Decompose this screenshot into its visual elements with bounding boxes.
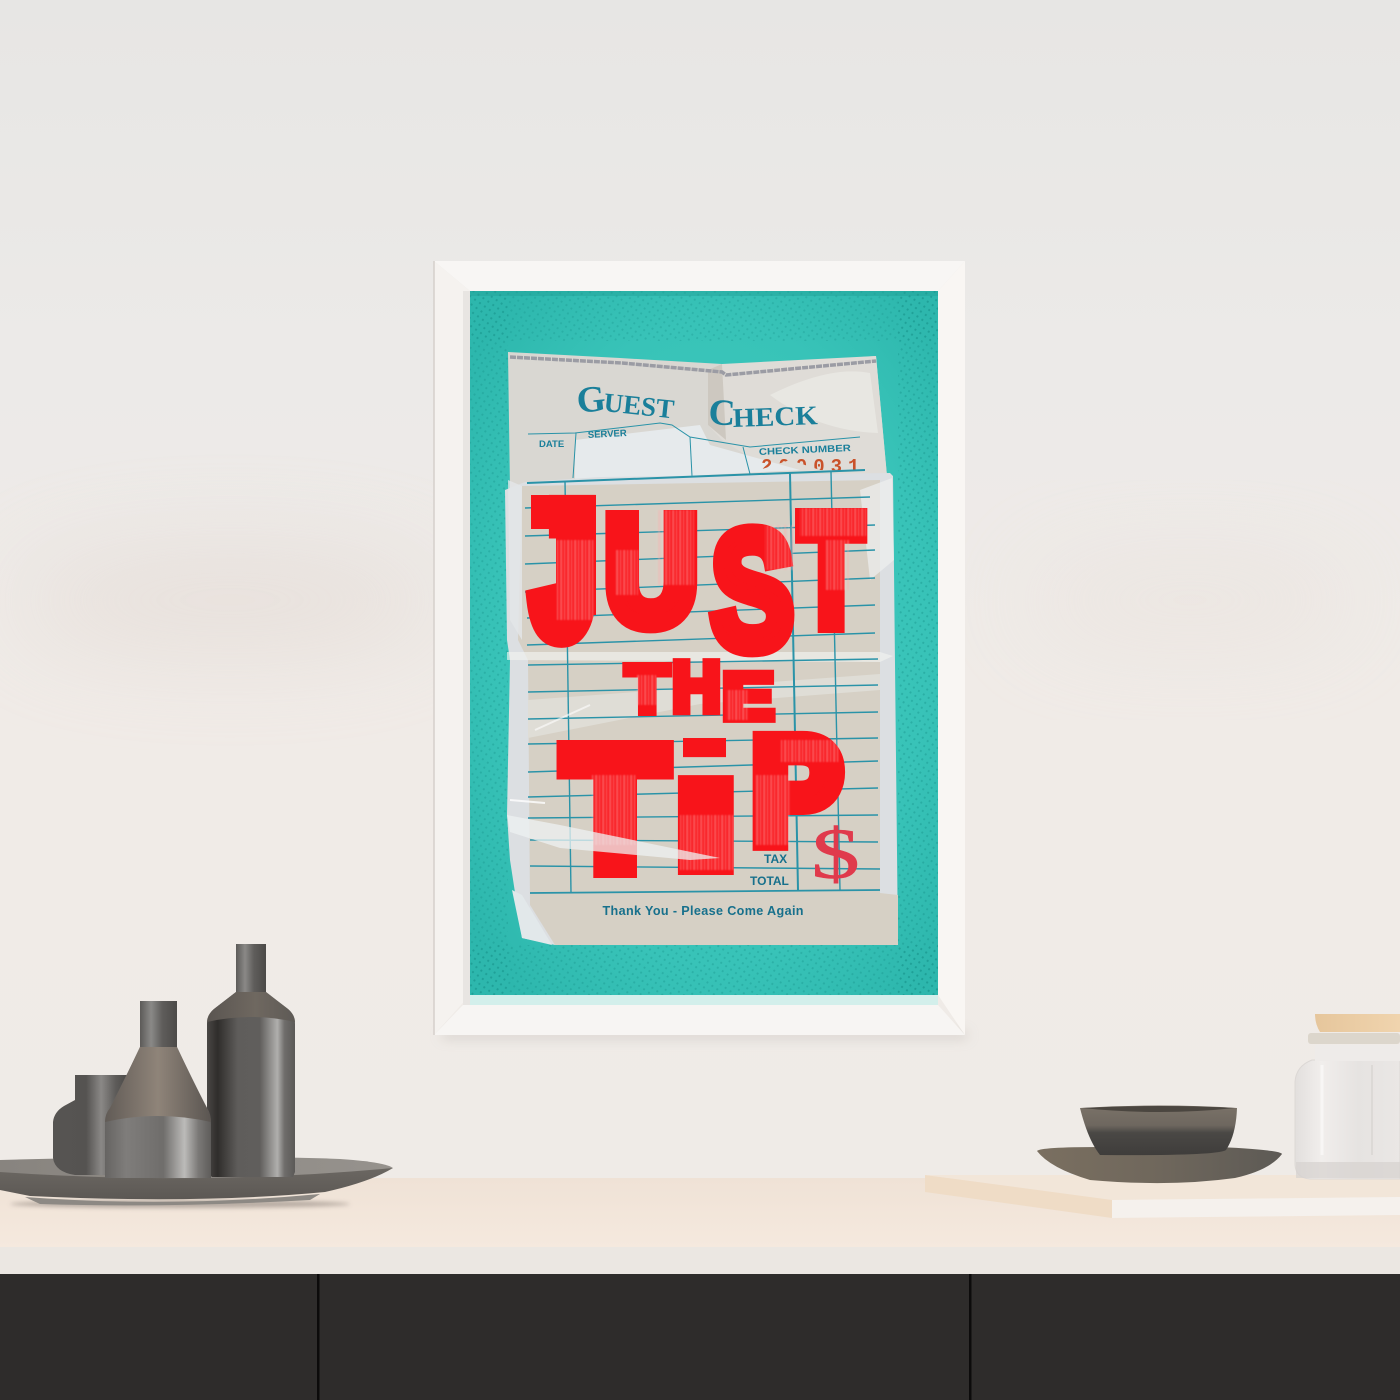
THE lettering: T xyxy=(626,652,669,727)
JUST lettering: S xyxy=(711,497,794,685)
upper sheet xyxy=(508,352,887,490)
TIP lettering xyxy=(556,730,846,878)
brush streak highlights xyxy=(556,508,866,870)
TIP lettering: P xyxy=(752,709,842,874)
cabinet doors xyxy=(0,1274,1400,1400)
bowl and saucer xyxy=(1037,1106,1282,1183)
JUST lettering: U xyxy=(605,487,697,655)
JUST lettering: J xyxy=(532,467,597,676)
title: guest check: C xyxy=(708,392,736,434)
THE lettering: E xyxy=(722,661,774,734)
guest check paper xyxy=(505,352,898,945)
middle bottle xyxy=(105,1001,211,1178)
THE lettering: H xyxy=(672,647,721,726)
tax and total labels xyxy=(750,852,789,888)
header fields: CHECK NUMBER xyxy=(759,443,851,458)
picture frame xyxy=(434,261,967,1038)
plastic fold highlight xyxy=(507,815,720,860)
perforated top edge xyxy=(510,357,876,375)
small vase xyxy=(53,1075,127,1175)
dollar sign: $ xyxy=(811,814,860,894)
ruled lines xyxy=(525,470,880,893)
tax and total labels: TAX xyxy=(764,852,787,866)
title: guest check: HECK xyxy=(732,400,818,433)
header fields: DATE xyxy=(539,439,564,450)
frame bars xyxy=(434,261,965,1035)
title: guest check: UEST xyxy=(602,387,676,424)
JUST lettering xyxy=(531,467,862,685)
title: guest check: G xyxy=(575,378,608,422)
JUST lettering: T xyxy=(800,483,862,657)
tray xyxy=(0,1168,393,1199)
TIP lettering: i xyxy=(650,705,763,916)
THE lettering xyxy=(626,647,774,734)
title: guest check xyxy=(575,378,818,434)
footer message: Thank You - Please Come Again xyxy=(602,904,804,918)
tall bottle xyxy=(207,944,295,1177)
check number: 200031 xyxy=(761,456,865,478)
glass jar with wooden lid xyxy=(1295,1014,1400,1179)
header fields xyxy=(539,428,851,458)
TIP lettering: T xyxy=(565,713,666,904)
header fields: SERVER xyxy=(588,428,627,441)
counter top xyxy=(0,1178,1400,1274)
cutting board xyxy=(925,1175,1400,1218)
tray with vases xyxy=(0,944,393,1208)
curled corner xyxy=(512,890,552,945)
teal backing with halftone dots xyxy=(463,291,938,1005)
lower sheet xyxy=(505,467,898,945)
tax and total labels: TOTAL xyxy=(750,874,789,888)
